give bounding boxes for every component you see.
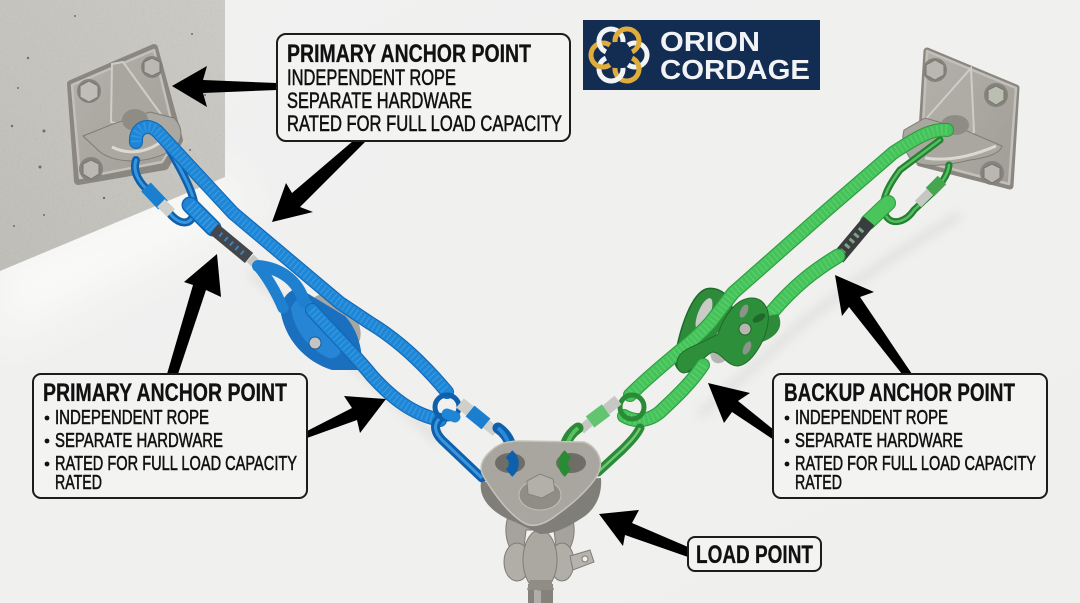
bolts [923,58,1008,185]
sleeve [214,229,249,258]
arrow: backup sleeve [835,275,912,374]
blue carabiner top [135,134,195,222]
callout: load point: LOAD POINT [696,541,813,569]
green carabiner bottom [564,395,644,472]
bolts [77,56,163,181]
green carabiner top [884,140,949,222]
text lines: RATED FOR FULL LOAD CAPACITY [287,111,562,136]
gusset [111,62,168,132]
rod [528,584,553,603]
concrete wall [0,0,225,271]
rope shadows [250,215,960,442]
bullet list: INDEPENDENT ROPE [55,407,209,429]
D ring ear [83,112,181,161]
heading: PRIMARY ANCHOR POINT [43,379,287,407]
callout: load point [688,537,821,571]
bullet list [785,407,1036,494]
callout: top primary anchor point [277,34,570,141]
blue lower rope with sleeve [190,205,304,308]
arrow: primary anchor plate [172,66,277,107]
wordmark: CORDAGE [660,54,810,85]
D ring ear [903,118,1002,165]
sleeve [838,221,869,258]
blue carabiner bottom [435,395,513,478]
green rope upper [630,130,947,395]
icon: interlaced knot [586,25,652,85]
bullet list [45,407,297,494]
bullet list: SEPARATE HARDWARE [795,430,963,452]
wordmark [660,26,810,85]
logo: Orion Cordage [583,20,820,90]
holes [495,453,586,473]
blue rope lower loop [312,310,440,420]
blue pulley [280,285,371,370]
text lines [287,65,562,136]
gusset [925,68,974,138]
wordmark: ORION [660,26,760,57]
bullet list: SEPARATE HARDWARE [55,430,223,452]
arrow: primary loop [307,396,386,438]
heading: PRIMARY ANCHOR POINT [287,40,531,68]
callout: backup anchor point [773,374,1047,498]
bullet list: RATED [55,472,102,494]
text lines: INDEPENDENT ROPE [287,65,456,90]
text lines: SEPARATE HARDWARE [287,88,472,113]
bullet list: INDEPENDENT ROPE [795,407,948,429]
arrow: load point [599,510,688,557]
left anchor plate [71,48,181,181]
green pulley back plate [675,288,780,372]
arrow: primary sleeve [167,254,221,374]
green lower rope with sleeve [772,203,888,312]
green pulley front plate [677,298,768,373]
shackle [504,516,594,590]
arrow: backup pulley [708,383,774,440]
triangle load plate [481,441,601,534]
green rope lower loop [624,365,703,420]
callout: left primary anchor point [33,374,307,498]
bolt [519,474,561,510]
arrow: primary rope [272,141,366,222]
blue rope upper [136,127,447,392]
bullet list: RATED [795,472,842,494]
bullet list: RATED FOR FULL LOAD CAPACITY [55,453,297,475]
right anchor plate [903,51,1016,186]
